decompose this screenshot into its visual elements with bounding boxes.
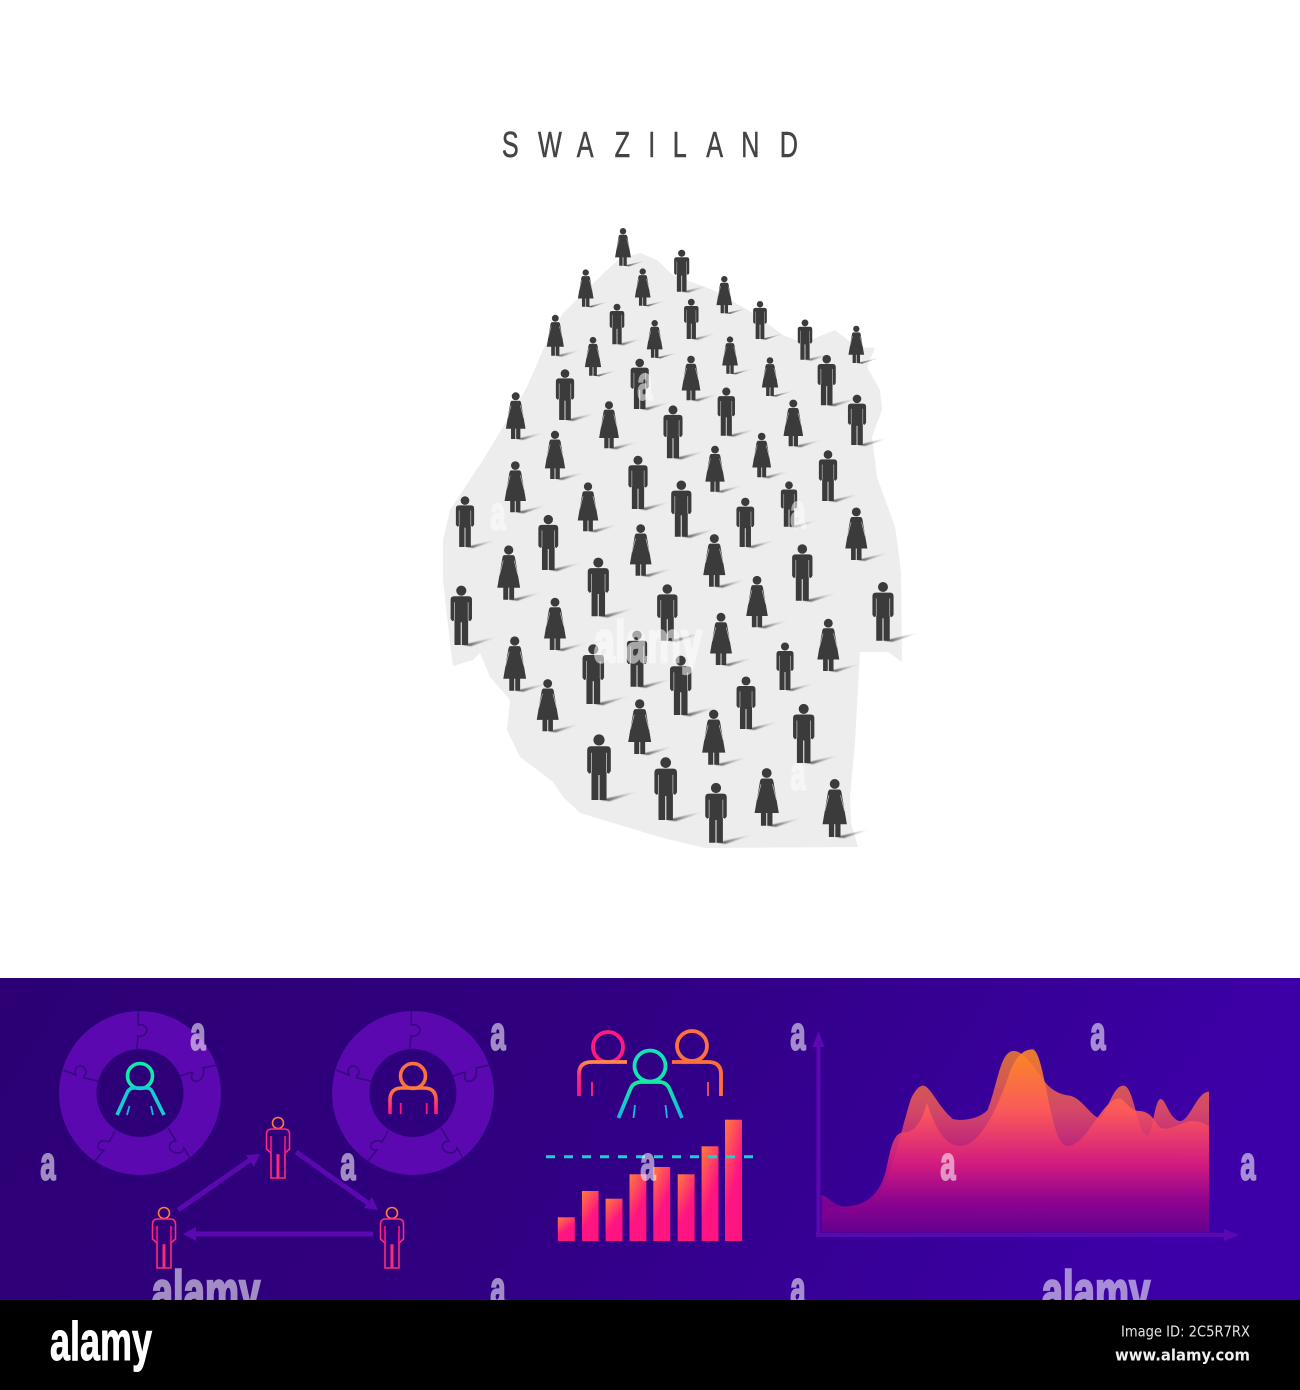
watermark letters: a xyxy=(40,1138,56,1191)
icon: man outline xyxy=(390,1064,436,1114)
watermark letters: a xyxy=(1240,1138,1256,1191)
watermark letters: a xyxy=(1090,1008,1106,1061)
title: SWAZILAND xyxy=(502,125,798,165)
map silhouette of Swaziland xyxy=(443,253,902,848)
chart axes xyxy=(812,1031,1239,1241)
footer bar xyxy=(0,1300,1300,1390)
watermark letters: a xyxy=(490,1008,506,1061)
icon: top person xyxy=(266,1118,290,1178)
footer logo: alamy xyxy=(50,1310,152,1372)
image id: Image ID: 2C5R7RX xyxy=(1121,1323,1250,1341)
watermark letters: alamy xyxy=(594,611,703,675)
icon: right person xyxy=(380,1208,404,1268)
icon: woman outline xyxy=(117,1064,164,1115)
bar chart xyxy=(558,1120,742,1241)
arrow: left to top xyxy=(178,1154,260,1210)
watermark letters: a xyxy=(190,1008,206,1061)
website: www.alamy.com xyxy=(1115,1346,1250,1365)
watermark letters: a xyxy=(340,1138,356,1191)
area chart layers xyxy=(821,1049,1209,1232)
watermark letters: a xyxy=(940,1138,956,1191)
people relationship triangle xyxy=(152,1118,404,1268)
arrow: top to right xyxy=(296,1152,378,1210)
watermark letters: a xyxy=(790,748,806,801)
watermark letters: a xyxy=(490,488,506,541)
dashed average line xyxy=(546,1155,754,1158)
watermark letters: a xyxy=(640,1138,656,1191)
watermark letters: a xyxy=(637,358,653,411)
watermark letters: a xyxy=(490,1263,506,1316)
watermark letters: alamy xyxy=(1042,1261,1151,1325)
infographic band background xyxy=(0,978,1300,1300)
puzzle donut with male icon xyxy=(332,1011,494,1175)
watermark letters: a xyxy=(790,486,806,539)
watermark letters: a xyxy=(790,1263,806,1316)
watermark letters: a xyxy=(790,1008,806,1061)
arrow: right to left xyxy=(183,1227,373,1241)
people figures forming the map xyxy=(451,228,921,844)
watermark letters: alamy xyxy=(152,1261,261,1325)
puzzle donut with female icon xyxy=(59,1011,221,1175)
icon: group of three people xyxy=(579,1031,721,1118)
watermark letters xyxy=(40,358,1256,1325)
icon: left person xyxy=(152,1208,176,1268)
